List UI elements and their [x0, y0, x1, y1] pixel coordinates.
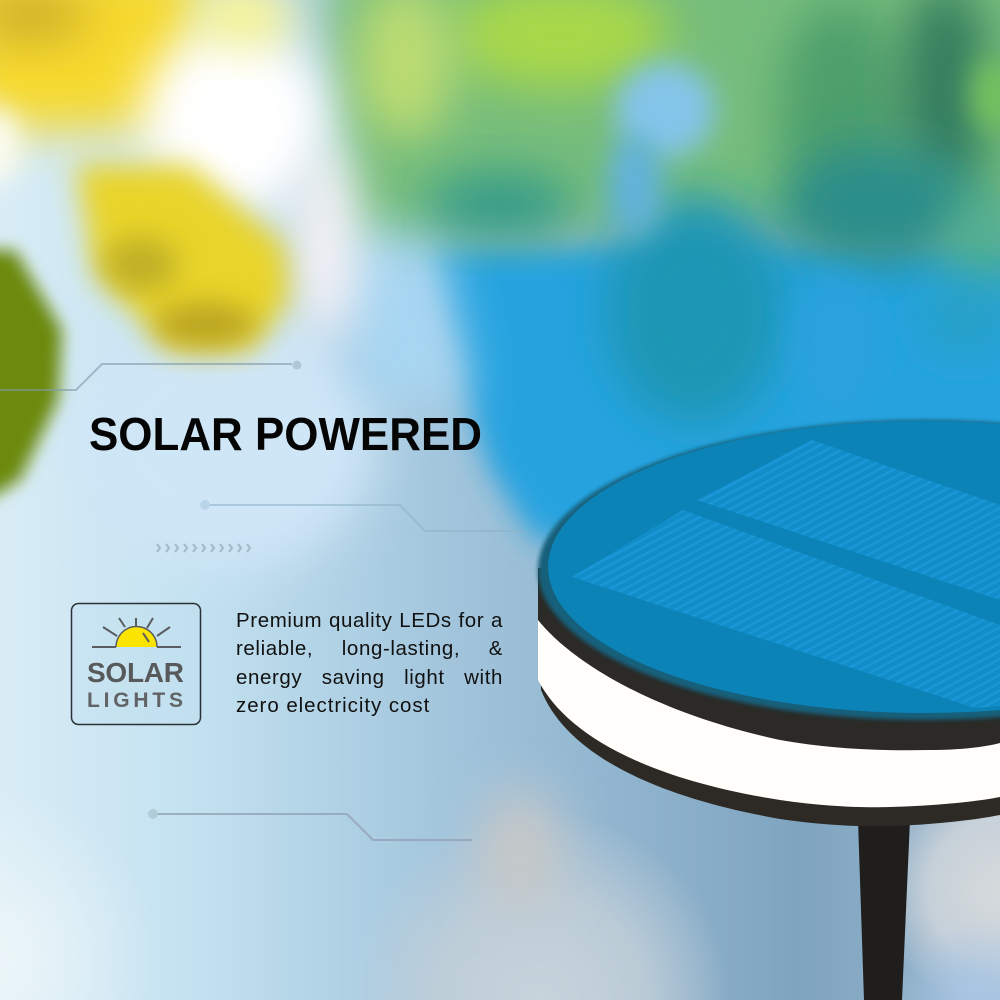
spike stem [858, 820, 910, 1000]
rim highlight [538, 420, 1000, 720]
line: top circuit [0, 360, 302, 390]
line: middle circuit [200, 500, 525, 531]
lower dark band [538, 570, 1000, 826]
white light ring [538, 610, 1000, 807]
top face [548, 421, 1000, 713]
badge text: SOLAR [87, 657, 184, 688]
solar panel: upper [697, 440, 1000, 600]
dark rim [538, 568, 1000, 750]
body text: reliable, long-lasting, & [236, 637, 503, 660]
badge: solar lights: LIGHTS [87, 689, 183, 712]
body text: zero electricity cost [236, 694, 430, 717]
line: bottom circuit [148, 809, 472, 840]
body text [236, 609, 503, 717]
body text: energy saving light with [236, 666, 503, 689]
body text: Premium quality LEDs for a [236, 609, 503, 632]
title: SOLAR POWERED [89, 408, 482, 460]
solar panel: lower [572, 510, 1000, 708]
icon: sun [92, 618, 181, 647]
